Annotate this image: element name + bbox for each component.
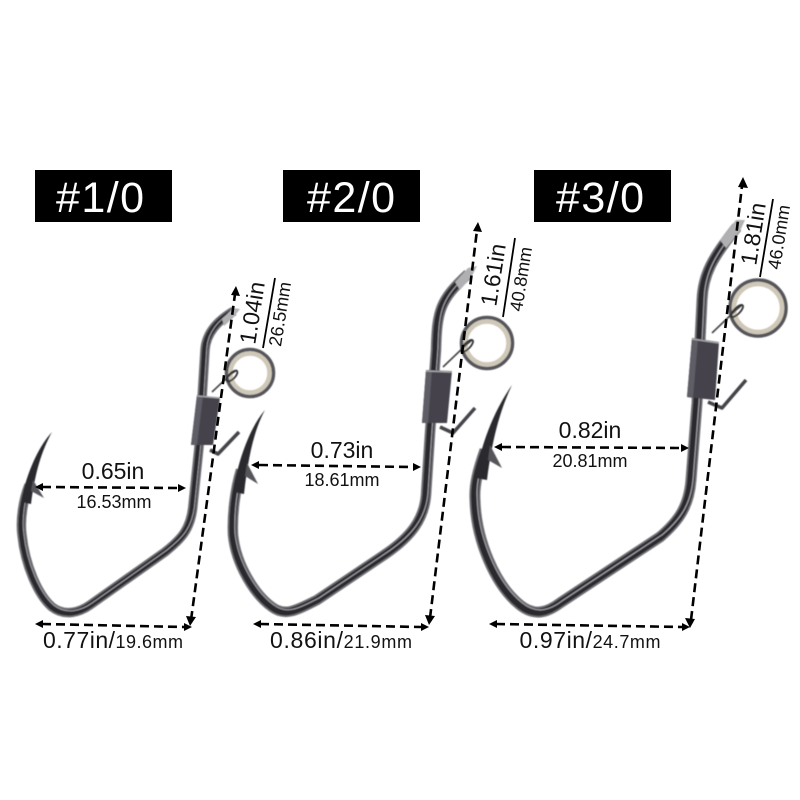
label: size #2/0 [283,170,420,222]
measurement: length #2/0: 1.61in [475,242,511,308]
measurement: length #1/0: 1.04in [234,280,270,346]
measurement: gap #1/0 [35,458,186,512]
measurement: gap #2/0: 18.61mm [304,470,380,490]
label: size #3/0: #3/0 [556,174,644,222]
measurement: gap #2/0 [251,437,421,490]
measurement: length #3/0 [685,177,794,628]
label: size #3/0 [534,170,671,222]
measurement: gap #3/0: 0.82in [559,417,621,443]
measurement: gap #3/0: 20.81mm [552,451,628,471]
keeper [440,408,475,433]
measurement: length #1/0: 26.5mm [265,280,295,348]
sleeve [422,370,452,423]
label: size #1/0 [35,170,172,222]
measurement: gap #2/0: 0.73in [311,437,373,463]
measurement: length #2/0 [425,222,536,625]
sleeve [687,338,719,400]
measurement: width #2/0 [253,620,429,653]
sleeve [191,395,220,445]
keeper [210,432,239,454]
measurement: gap #3/0 [494,417,689,471]
measurement: length #3/0: 1.81in [735,201,771,267]
ring and wire [712,280,786,336]
ring and wire [443,318,512,368]
measurement: width #1/0: 0.77in/19.6mm [43,627,183,653]
hook #1/0 [21,308,274,613]
measurement: width #3/0 [489,620,690,653]
hook #2/0 [233,266,513,612]
measurement: gap #1/0: 16.53mm [76,492,152,512]
label: size #2/0: #2/0 [307,174,395,222]
hook #3/0 [475,220,786,612]
ring and wire [212,350,274,396]
measurement: width #3/0: 0.97in/24.7mm [520,627,660,653]
measurement: length #2/0: 40.8mm [506,245,536,313]
measurement: length #1/0 [186,278,295,626]
measurement: gap #1/0: 0.65in [82,458,144,484]
measurement: length #3/0: 46.0mm [764,203,794,271]
label: size #1/0: #1/0 [56,174,144,222]
measurement: width #2/0: 0.86in/21.9mm [270,627,412,653]
keeper [708,380,746,408]
